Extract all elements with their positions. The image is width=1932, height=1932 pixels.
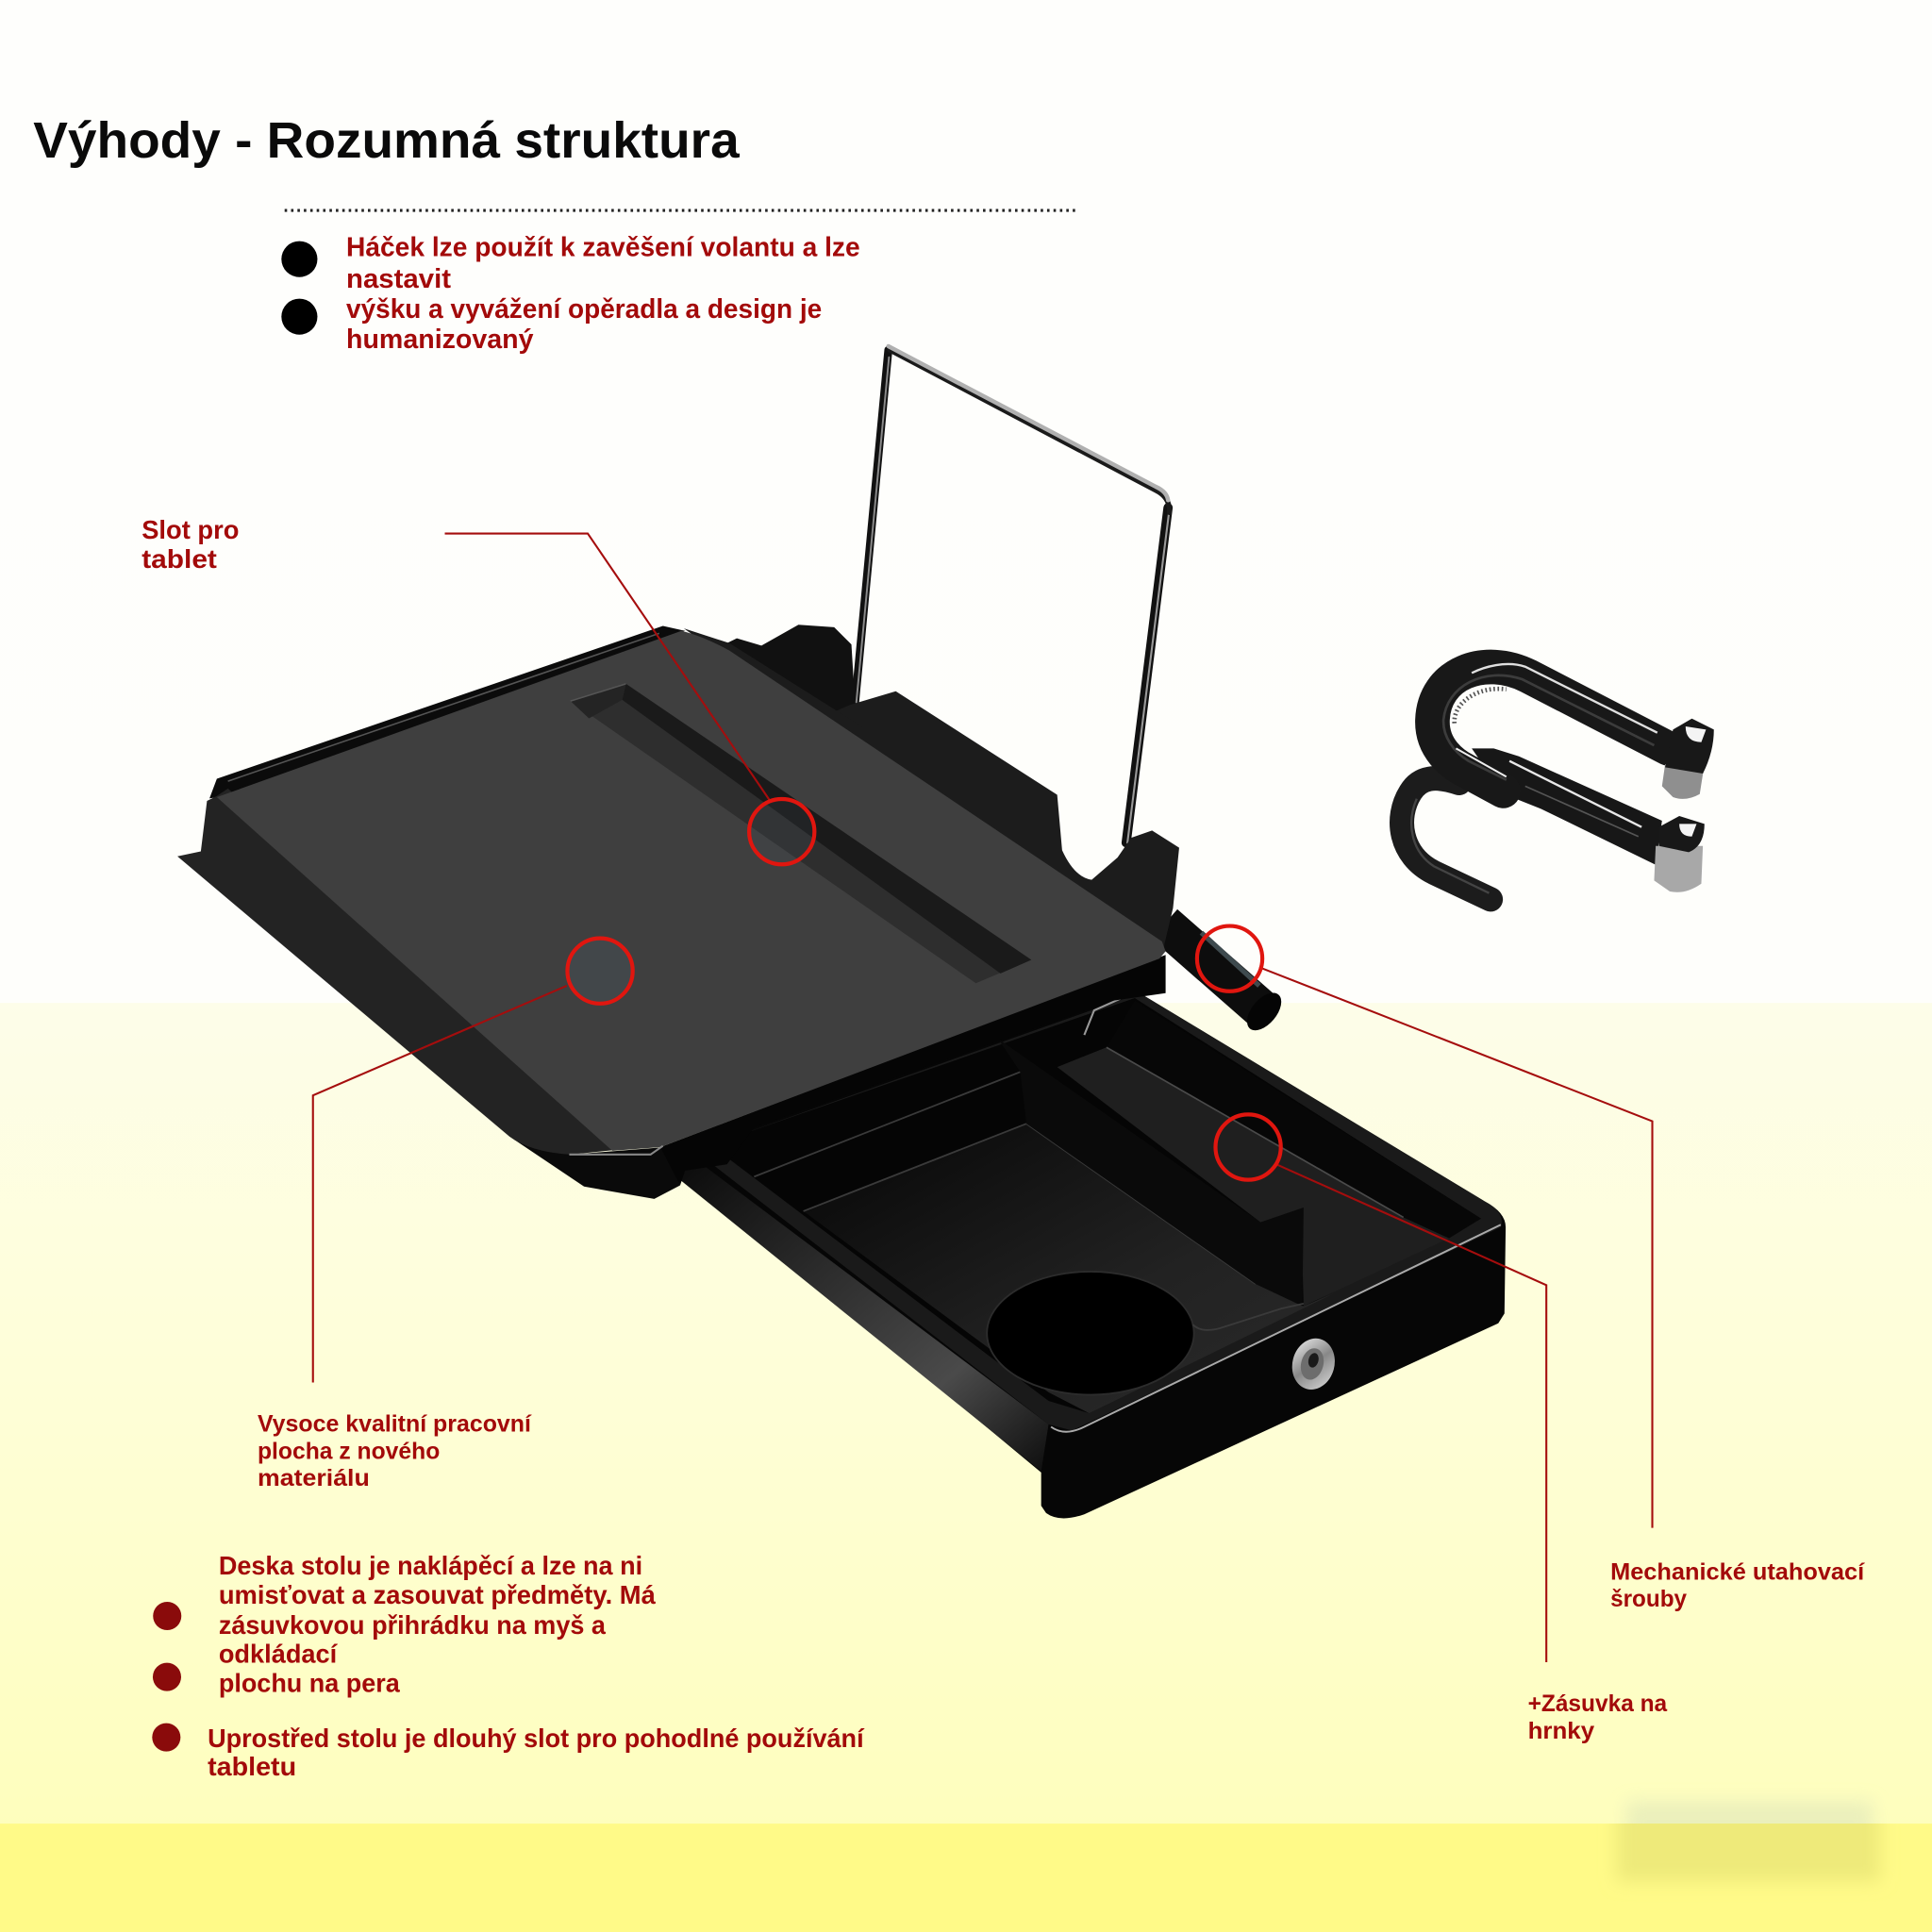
cup holder (987, 1272, 1194, 1395)
upper hook (1432, 664, 1714, 799)
bullet dot 2 (153, 1663, 181, 1691)
background: soft shaded patch (1617, 1802, 1880, 1881)
leader line: work surface (313, 986, 567, 1382)
bullet text: tilting desk: Deska stolu je naklápěcí a lze na ni (219, 1551, 642, 1580)
bullet text (346, 233, 860, 355)
bullet dot 2 (281, 299, 317, 335)
label: cup drawer: +Zásuvka na (1528, 1691, 1667, 1717)
product: rear clamp pole (1164, 924, 1288, 1037)
tray back rim (209, 626, 685, 798)
front rim highlight (1051, 1224, 1501, 1432)
top bullet list (281, 233, 860, 355)
tablet slot (571, 684, 1031, 983)
right compartment upper step (1107, 1001, 1481, 1239)
bullet text: tilting desk: umisťovat a zasouvat předměty. Má (219, 1580, 656, 1609)
tray clip highlight (1084, 995, 1127, 1035)
drawer left side face (677, 1154, 1049, 1472)
bullet text: long slot (208, 1724, 865, 1781)
lower hook screw (1654, 846, 1703, 892)
bullet text: tilting desk (219, 1551, 656, 1697)
label: work surface: Vysoce kvalitní pracovní (258, 1412, 532, 1438)
rear edge strip (684, 628, 862, 740)
leader line: screws (1259, 967, 1653, 1528)
upper hook screw (1662, 764, 1705, 799)
background: bottom yellow band (0, 1824, 1932, 1932)
bullet text: tilting desk: odkládací (219, 1640, 338, 1669)
label: work surface (258, 1412, 532, 1491)
callout ring: tablet slot (749, 799, 814, 864)
title: Výhody - Rozumná struktura (33, 113, 741, 169)
lower hook (1402, 748, 1705, 899)
bullet text: výšku a vyvážení opěradla a design je (346, 294, 822, 325)
tray underside (508, 1136, 680, 1199)
bullet text: long slot: Uprostřed stolu je dlouhý slot pro pohodlné používání (208, 1724, 865, 1753)
drawer interior (708, 998, 1481, 1413)
bottom bullet list (152, 1551, 865, 1781)
bullet text: nastavit (346, 264, 451, 294)
background: white upper area (0, 0, 1932, 1003)
label: cup drawer: hrnky (1528, 1719, 1594, 1744)
dotted divider (285, 209, 1075, 211)
bullet text: Háček lze použít k zavěšení volantu a lze (346, 233, 860, 263)
bullet dot 3 (152, 1724, 180, 1752)
divider wall (998, 1039, 1304, 1306)
bullet dot 1 (281, 242, 317, 277)
product: sliding drawer (677, 993, 1506, 1518)
right compartment floor (1058, 1047, 1449, 1306)
background: pale yellow gradient (0, 1003, 1932, 1824)
cup notch edge (1192, 1304, 1304, 1330)
bullet text: long slot: tabletu (208, 1752, 296, 1781)
tray side band (177, 789, 631, 1155)
lock (1287, 1334, 1341, 1394)
tray top surface (217, 631, 1166, 1151)
drawer rim (695, 993, 1502, 1430)
label: work surface: materiálu (258, 1466, 370, 1491)
product: rear hinge and support (727, 625, 1179, 955)
leader line: tablet slot (445, 534, 770, 801)
product: adjustable hooks (1402, 664, 1714, 899)
label: screws: šrouby (1610, 1587, 1687, 1612)
tray front edge highlight (569, 1146, 663, 1155)
bullet dot 1 (153, 1602, 181, 1630)
callout ring: pole screw (1197, 926, 1262, 991)
bullet text: humanizovaný (346, 325, 534, 355)
label: screws (1610, 1559, 1865, 1612)
label: cup drawer (1528, 1691, 1667, 1744)
label: work surface: plocha z nového (258, 1439, 440, 1464)
bullet text: tilting desk: plochu na pera (219, 1668, 400, 1697)
leader line: cup drawer (1276, 1164, 1546, 1662)
product: tray (177, 626, 1166, 1199)
label: screws: Mechanické utahovací (1610, 1559, 1865, 1585)
product: metal tablet frame (855, 346, 1170, 842)
callout ring: drawer (1215, 1114, 1281, 1180)
bullet text: tilting desk: zásuvkovou přihrádku na myš a (219, 1610, 606, 1640)
callout ring: work surface (567, 939, 633, 1004)
drawer floor (804, 1124, 1333, 1413)
label: tablet slot (142, 515, 239, 574)
label: tablet slot: tablet (142, 544, 217, 574)
label: tablet slot: Slot pro (142, 515, 239, 544)
back step highlights (754, 1072, 1256, 1284)
drawer body (677, 993, 1506, 1518)
